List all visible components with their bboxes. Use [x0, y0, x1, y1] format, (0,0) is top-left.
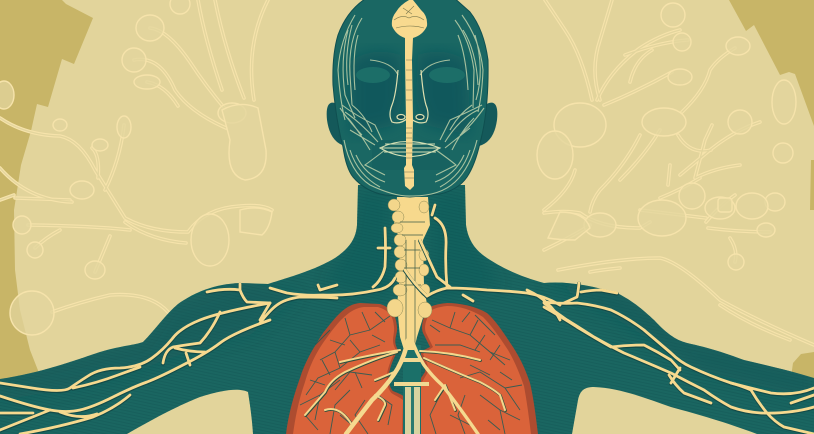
lips — [380, 142, 440, 156]
background airway bulbs — [0, 0, 796, 335]
background airway tree outlines — [0, 0, 814, 345]
background corner: right notch — [810, 160, 814, 210]
nose — [390, 70, 428, 123]
spine and vertebrae in neck — [387, 197, 432, 350]
background corner: left — [0, 0, 93, 390]
skull and face — [333, 0, 488, 197]
cheek and skull strands — [338, 15, 484, 196]
face shadow — [350, 52, 470, 135]
background corner: top right — [729, 0, 814, 126]
background corner: bottom right — [791, 352, 814, 385]
lung: right — [412, 303, 538, 434]
eyes — [356, 67, 465, 83]
lung: left — [286, 303, 405, 434]
bronchial tree — [305, 340, 506, 434]
nerve network — [0, 205, 814, 434]
ears — [327, 103, 497, 146]
veins: right lung — [430, 312, 522, 434]
head — [327, 0, 497, 197]
brain bulb and stem — [392, 0, 427, 190]
figure body: arms, shoulders, neck — [0, 185, 814, 434]
veins: left lung — [300, 312, 392, 434]
spine lower segment — [394, 345, 429, 434]
